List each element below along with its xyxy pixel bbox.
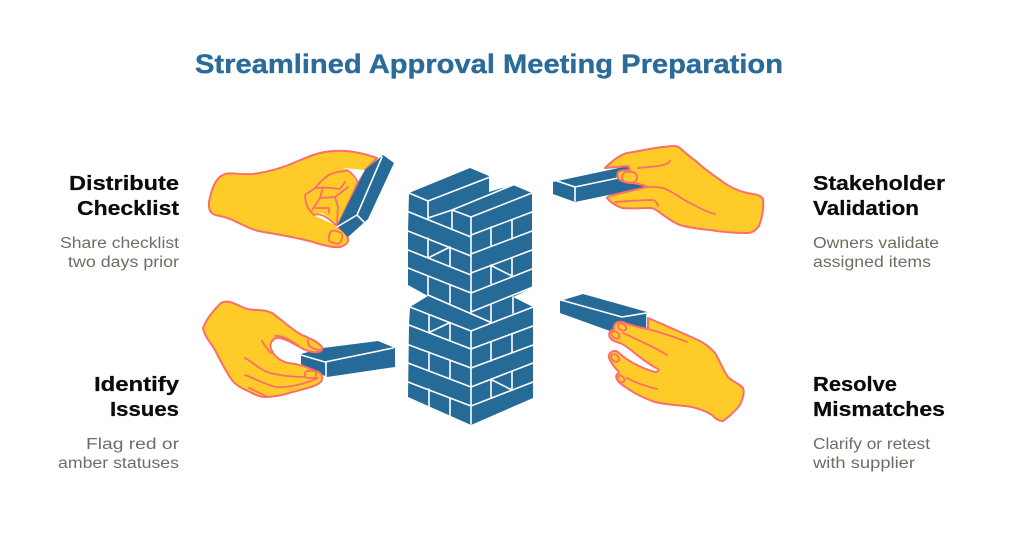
text block: resolve mismatches: Mismatches bbox=[813, 398, 945, 421]
text block: identify issues: Flag red or bbox=[86, 436, 179, 453]
block held bbox=[337, 155, 394, 237]
title: Streamlined Approval Meeting Preparation bbox=[195, 49, 783, 79]
block held bbox=[560, 294, 648, 331]
text block: stakeholder validation: Stakeholder bbox=[813, 172, 945, 195]
text block: identify issues: Issues bbox=[110, 398, 179, 421]
hand: bottom right with block bbox=[560, 294, 744, 421]
text block: distribute checklist bbox=[60, 172, 180, 271]
text block: resolve mismatches: with supplier bbox=[812, 455, 915, 472]
thumb nail bbox=[622, 172, 637, 182]
fist creases bbox=[305, 170, 358, 226]
text block: stakeholder validation bbox=[813, 172, 945, 271]
block tower bbox=[408, 168, 533, 425]
text block: distribute checklist: Share checklist bbox=[60, 235, 180, 252]
text block: distribute checklist: Distribute bbox=[69, 172, 179, 195]
text block: resolve mismatches bbox=[812, 373, 945, 472]
hand: bottom left with block bbox=[203, 302, 395, 397]
text block: stakeholder validation: Owners validate bbox=[813, 235, 939, 252]
finger nails bbox=[610, 322, 627, 384]
text block: distribute checklist: Checklist bbox=[77, 197, 179, 220]
text block: resolve mismatches: Resolve bbox=[813, 373, 897, 396]
text block: identify issues bbox=[58, 373, 180, 472]
text block: resolve mismatches: Clarify or retest bbox=[813, 436, 931, 453]
thumb nail bbox=[305, 371, 316, 378]
text block: distribute checklist: two days prior bbox=[68, 254, 179, 271]
hand: top left with block bbox=[209, 151, 394, 247]
thumb nail bbox=[328, 230, 343, 245]
text block: stakeholder validation: assigned items bbox=[813, 254, 931, 271]
block held bbox=[553, 166, 647, 202]
block held bbox=[301, 341, 395, 377]
text block: identify issues: Identify bbox=[94, 373, 180, 396]
text block: stakeholder validation: Validation bbox=[813, 197, 919, 220]
hand: top right with block bbox=[553, 146, 763, 233]
gap between finger and fist bbox=[313, 168, 365, 226]
text block: identify issues: amber statuses bbox=[58, 455, 179, 472]
